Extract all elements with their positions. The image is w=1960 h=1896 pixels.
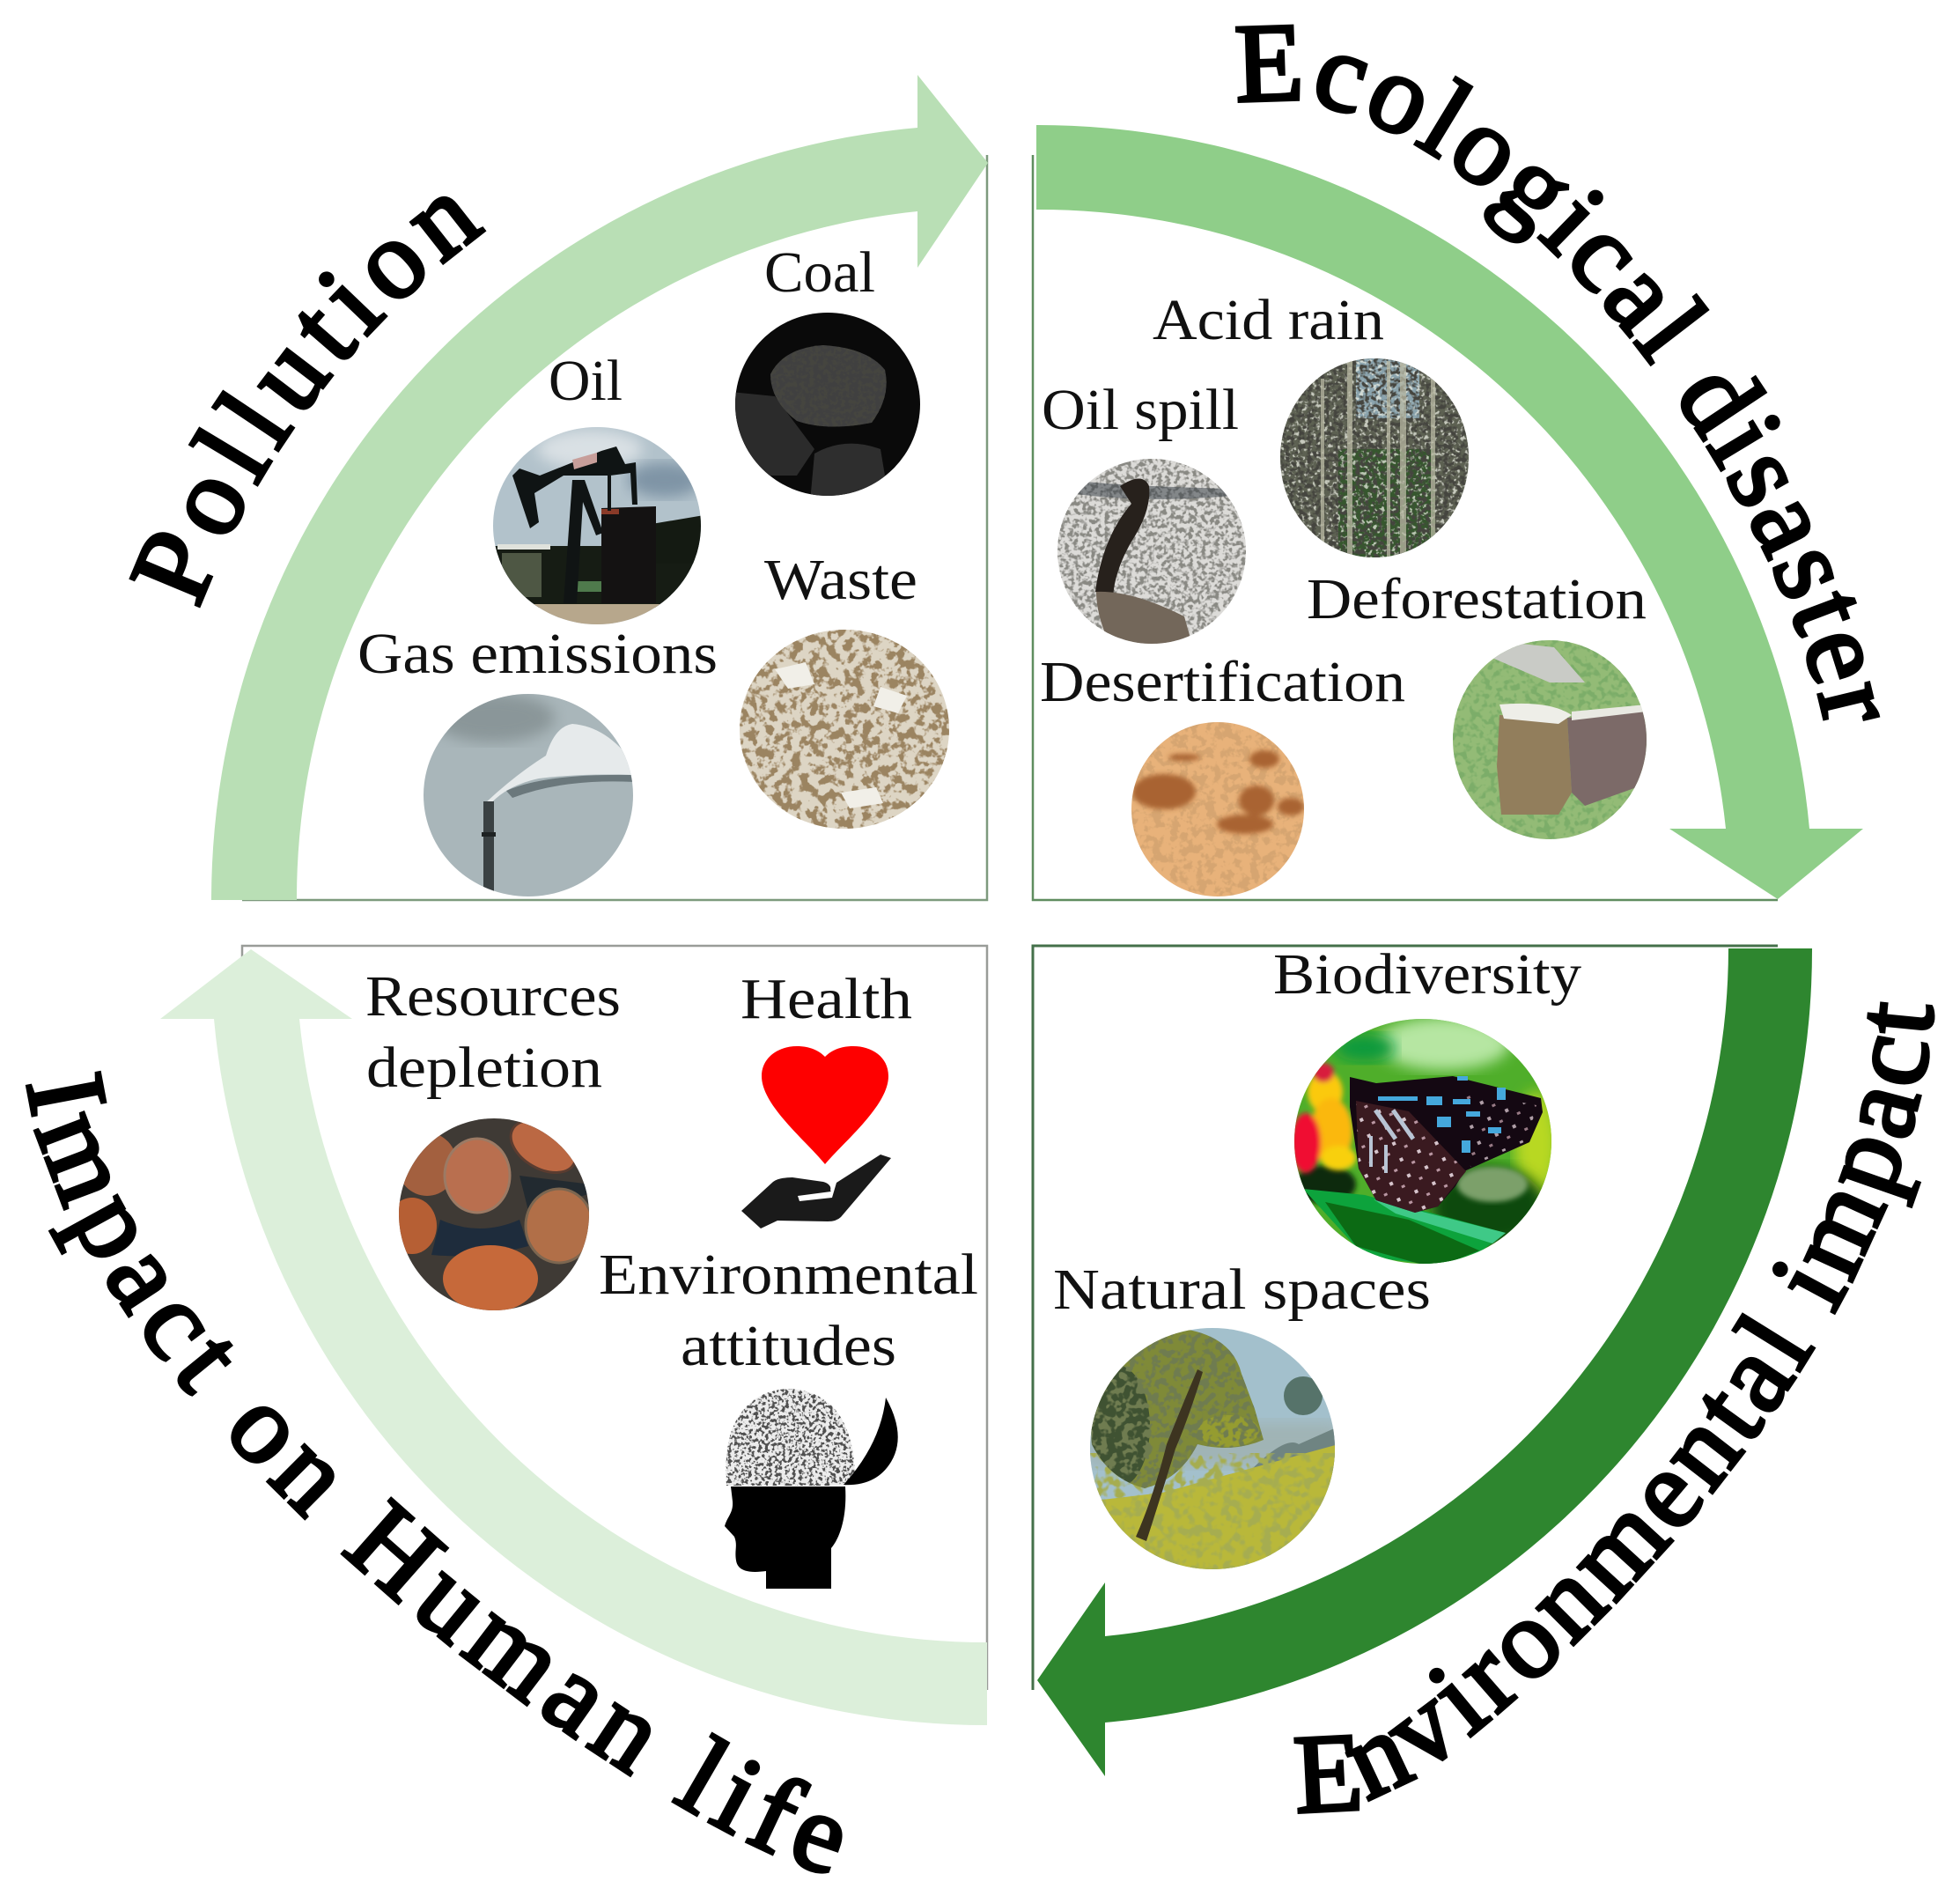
arrow: impact on human life xyxy=(160,949,987,1725)
label: Environmental attitudes: Environmental xyxy=(599,1243,978,1307)
label: Oil spill: Oil spill xyxy=(1042,378,1239,442)
label: Gas emissions: Gas emissions xyxy=(357,622,718,686)
label: Deforestation: Deforestation xyxy=(1307,567,1647,631)
panel: pollution xyxy=(129,75,988,902)
arrow: pollution xyxy=(211,75,988,900)
photo: coal xyxy=(731,308,925,502)
label: Resources depletion: depletion xyxy=(366,1036,602,1100)
panel: impact on human life xyxy=(25,944,988,1874)
label: Resources depletion: Resources xyxy=(365,964,621,1029)
icon: hand xyxy=(741,1155,891,1228)
photo: waste xyxy=(735,625,955,832)
photo: oil pump xyxy=(493,427,701,624)
photo: logs xyxy=(399,1118,589,1310)
label: Biodiversity: Biodiversity xyxy=(1273,942,1581,1007)
arrow: ecological disaster xyxy=(1036,125,1863,899)
label: Natural spaces: Natural spaces xyxy=(1053,1258,1431,1322)
arrow: environmental impact xyxy=(1037,948,1812,1776)
label: Coal: Coal xyxy=(764,240,875,305)
icon: heart xyxy=(762,1046,888,1164)
label: Resources depletion xyxy=(365,964,621,1100)
photo: deforestation xyxy=(1448,636,1651,843)
photo: natural spaces xyxy=(1083,1325,1338,1576)
photo: gas emissions xyxy=(421,691,637,898)
heading: Impact on Human life: Impact on Human life xyxy=(25,1071,843,1874)
label: Desertification: Desertification xyxy=(1040,650,1405,714)
label: Environmental attitudes xyxy=(599,1243,978,1378)
panel: ecological disaster xyxy=(1032,25,1881,902)
heading: Pollution: Pollution xyxy=(129,196,486,608)
label: Environmental attitudes: attitudes xyxy=(681,1314,896,1378)
label: Waste: Waste xyxy=(764,548,917,612)
heading: Environmental impact: Environmental impact xyxy=(1293,1001,1935,1814)
panel: environmental impact xyxy=(1032,942,1935,1814)
label: Health: Health xyxy=(741,967,912,1031)
photo: butterfly xyxy=(1290,1013,1558,1268)
heading: Ecological disaster: Ecological disaster xyxy=(1234,25,1881,721)
label: Oil: Oil xyxy=(549,349,623,413)
label: Acid rain: Acid rain xyxy=(1153,288,1384,352)
photo: acid rain xyxy=(1277,357,1475,561)
photo: oil spill xyxy=(1055,456,1249,648)
photo: desertification xyxy=(1127,718,1308,899)
icon: head with open mind xyxy=(722,1387,898,1589)
